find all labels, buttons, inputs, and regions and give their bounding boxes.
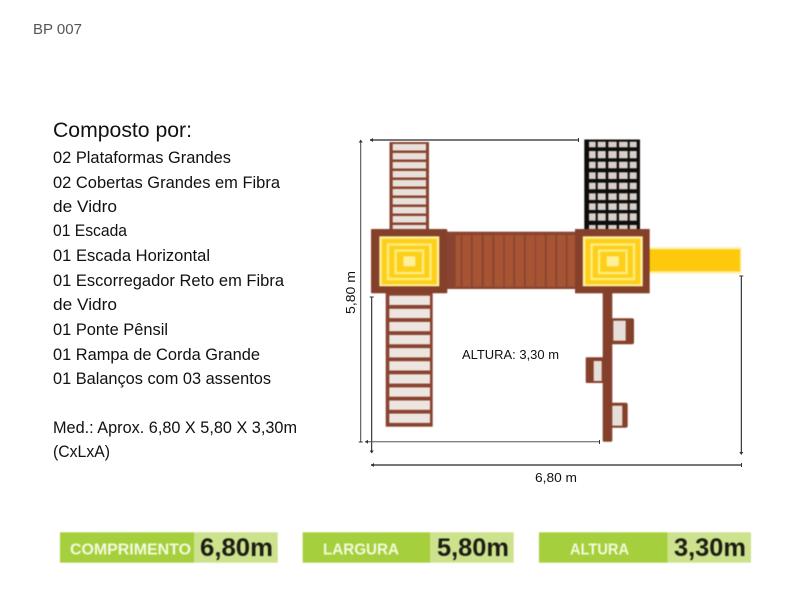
rope net ramp xyxy=(584,140,640,230)
badge value: 3,30m xyxy=(674,534,746,562)
swing seat 2 xyxy=(586,357,604,383)
dimension label: height 5,80 m: 5,80 m xyxy=(343,271,358,314)
list item: ladder: 01 Escada xyxy=(53,222,128,240)
top ladder xyxy=(390,142,429,232)
list item: slide: 01 Escorregador Reto em Fibra xyxy=(53,272,285,290)
dimension label: altura: ALTURA: 3,30 m xyxy=(462,347,559,362)
measurements note continued: (CxLxA) xyxy=(53,443,110,461)
list item: platforms: 02 Plataformas Grandes xyxy=(53,149,231,167)
list item: rope ramp: 01 Rampa de Corda Grande xyxy=(53,346,260,364)
left height line xyxy=(360,141,362,442)
swing seat 1 xyxy=(611,318,634,344)
dimension arrowheads xyxy=(359,138,743,467)
dimension label: length 6,80 m: 6,80 m xyxy=(535,470,577,485)
list item: swings: 01 Balanços com 03 assentos xyxy=(53,370,271,388)
list item: horizontal ladder: 01 Escada Horizontal xyxy=(53,247,210,265)
measurements note: Med.: Aprox. 6,80 X 5,80 X 3,30m xyxy=(53,419,297,437)
swing seat 3 xyxy=(611,403,628,428)
list item: roofs: 02 Cobertas Grandes em Fibra xyxy=(53,174,281,192)
hanging bridge xyxy=(447,232,577,289)
badge label: COMPRIMENTO xyxy=(70,542,191,558)
left platform with roof xyxy=(371,229,447,293)
bottom ladder xyxy=(386,292,433,427)
list item: roofs continued: de Vidro xyxy=(53,198,117,216)
badge: altura xyxy=(539,532,751,563)
badge: largura xyxy=(303,532,514,563)
right height line xyxy=(740,276,742,454)
badge value: 5,80m xyxy=(437,534,509,562)
badge label: ALTURA xyxy=(570,542,629,558)
badge value: 6,80m xyxy=(200,534,273,562)
inner height line xyxy=(371,297,373,453)
top width line xyxy=(370,139,578,141)
list item: slide continued: de Vidro xyxy=(53,296,117,314)
playground plan diagram xyxy=(371,140,742,442)
code label: BP 007: BP 007 xyxy=(33,22,82,38)
swing set xyxy=(586,292,634,442)
heading: Composto por: Composto por: xyxy=(53,118,192,142)
swing beam xyxy=(603,292,612,442)
right platform with roof xyxy=(575,229,650,293)
bottom width line xyxy=(371,464,742,466)
slide xyxy=(649,247,742,274)
badge label: LARGURA xyxy=(323,542,399,558)
badge: comprimento xyxy=(60,532,278,563)
inner width line xyxy=(365,441,600,443)
dimension lines xyxy=(361,140,742,465)
list item: bridge: 01 Ponte Pênsil xyxy=(53,321,168,339)
text block: composition list xyxy=(53,118,297,461)
